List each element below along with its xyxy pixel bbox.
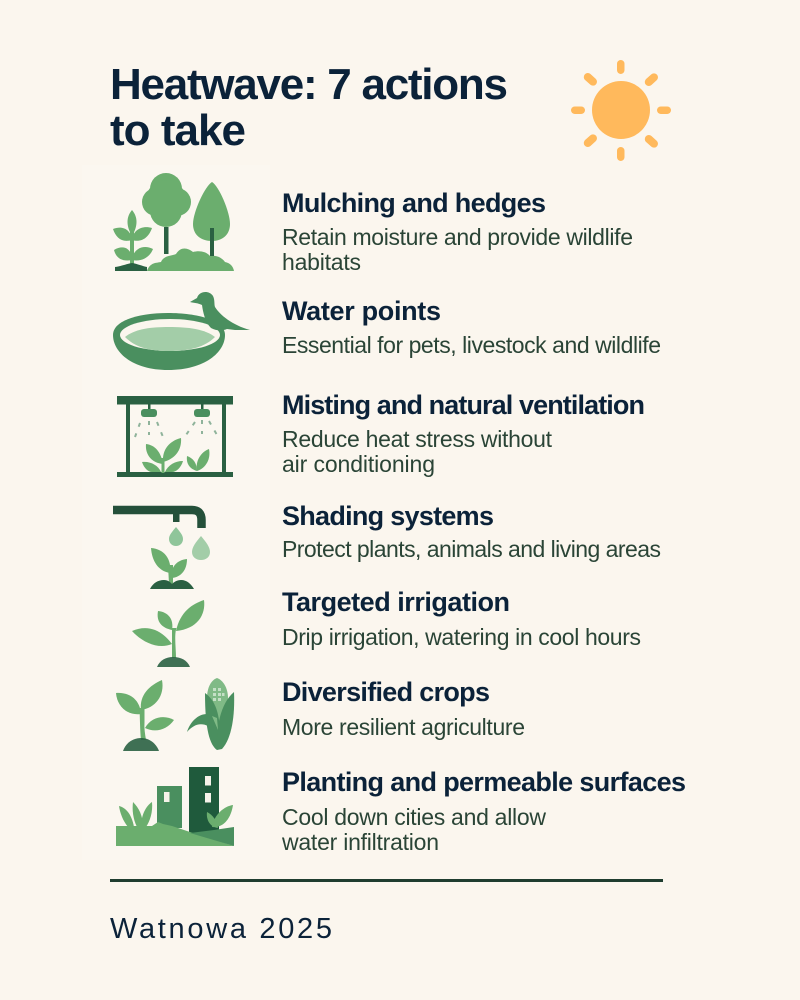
text block: Protect plants, animals and living areas (282, 536, 661, 562)
text block: Reduce heat stress without (282, 426, 553, 452)
text block: Drip irrigation, watering in cool hours (282, 624, 641, 650)
action row: targeted irrigation (132, 587, 641, 667)
heading: Mulching and hedges (282, 188, 546, 218)
heading: Targeted irrigation (282, 587, 510, 617)
icon: misting frame (117, 396, 233, 477)
action row: planting and permeable surfaces (116, 767, 686, 855)
text block: Retain moisture and provide wildlife (282, 224, 633, 250)
heading: Water points (282, 296, 441, 326)
icon: trees and hedge (113, 173, 234, 271)
text block: water infiltration (281, 829, 439, 855)
action row: shading systems (113, 501, 661, 589)
heading: Diversified crops (282, 677, 490, 707)
icon: buildings and planted ground (116, 767, 234, 846)
text block: Essential for pets, livestock and wildlife (282, 332, 661, 358)
title (110, 60, 508, 155)
text block (282, 224, 633, 275)
icon: dripping tap and seedling (113, 510, 210, 589)
heading: Misting and natural ventilation (282, 390, 645, 420)
heading: Shading systems (282, 501, 494, 531)
icon: seedling (132, 600, 204, 667)
title: Heatwave: 7 actions (110, 60, 508, 109)
icon: bird on water bowl (113, 292, 250, 370)
action row: diversified crops (116, 677, 525, 751)
text block (281, 804, 546, 855)
text block: Cool down cities and allow (282, 804, 546, 830)
text block: More resilient agriculture (282, 714, 525, 740)
icon: seedling and corn (116, 678, 234, 751)
text block: habitats (282, 249, 361, 275)
action row: water points (113, 292, 661, 370)
action row: misting and natural ventilation (117, 390, 645, 477)
icon: sun (571, 60, 671, 161)
action row: mulching and hedges (113, 173, 633, 275)
text block: air conditioning (282, 451, 435, 477)
heading: Planting and permeable surfaces (282, 767, 686, 797)
footer credit: Watnowa 2025 (110, 913, 332, 945)
text block (282, 426, 553, 477)
title: to take (110, 106, 246, 155)
